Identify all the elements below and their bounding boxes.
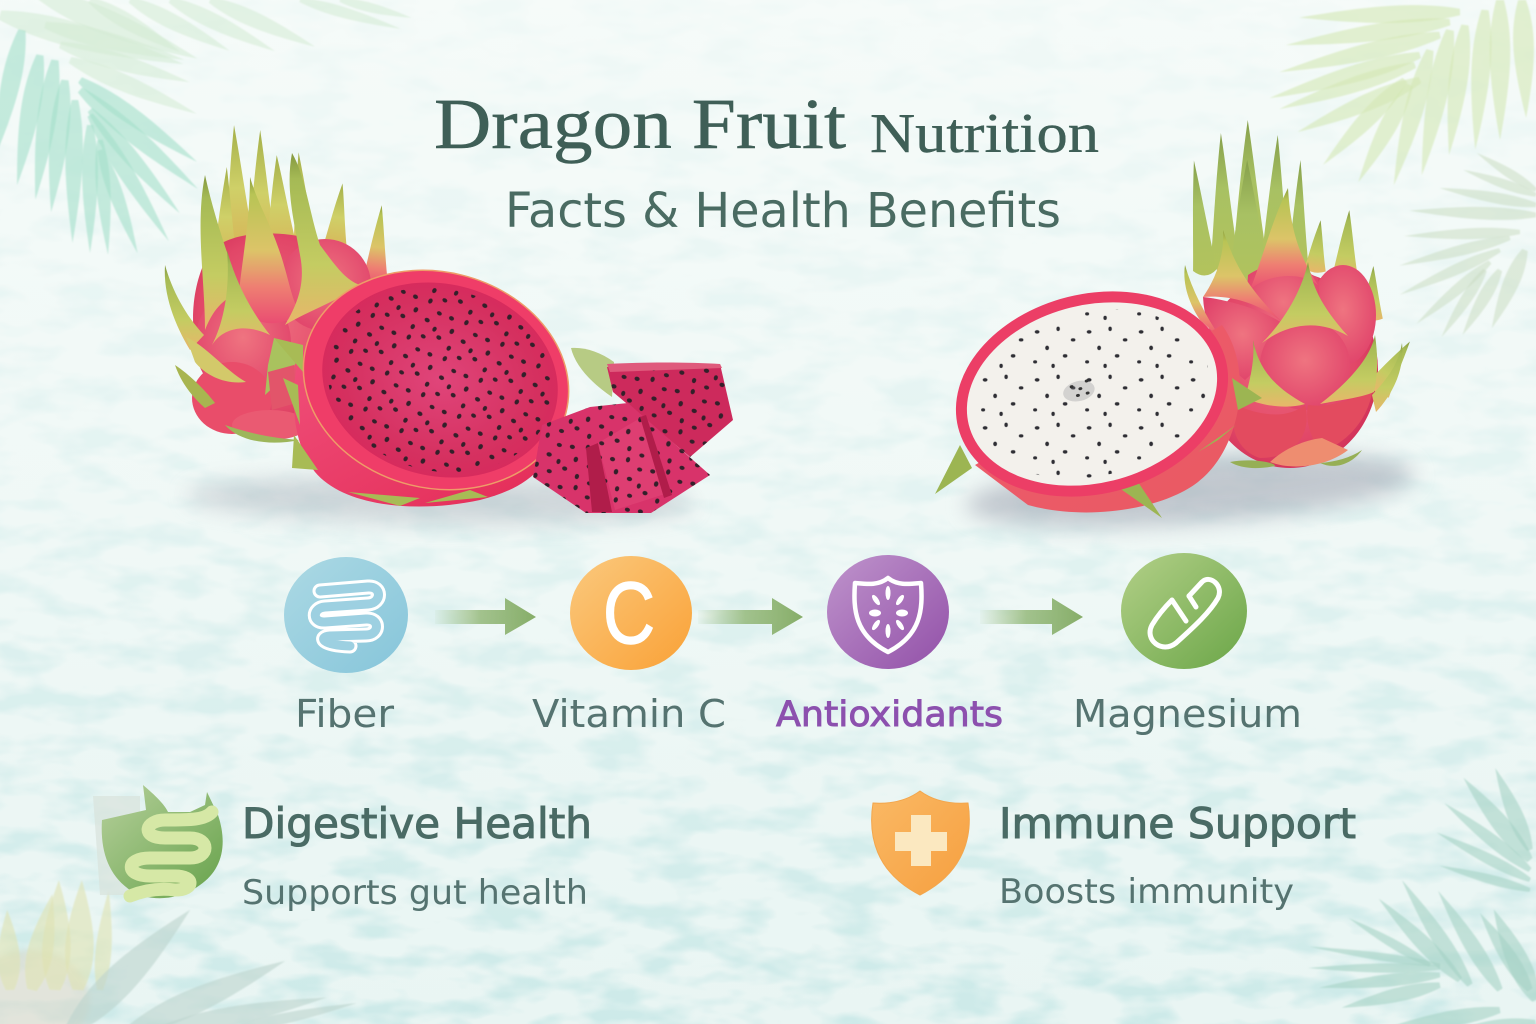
back spikes xyxy=(1304,209,1422,400)
nutrient labels xyxy=(295,692,1302,736)
benefit: immune support xyxy=(872,791,1356,912)
heading: Immune Support: Immune Support xyxy=(999,799,1356,848)
flesh xyxy=(301,258,579,502)
title: Nutrition: Nutrition xyxy=(870,103,1099,165)
heading: Digestive Health: Digestive Health xyxy=(242,799,592,848)
right lobe xyxy=(279,239,371,331)
left lobes xyxy=(195,288,291,398)
upper lobes xyxy=(1310,265,1376,365)
title xyxy=(434,84,1099,239)
label: Magnesium: Magnesium xyxy=(1073,692,1302,736)
base leaves xyxy=(1230,450,1362,468)
ground shadows xyxy=(185,440,1417,540)
outer skin xyxy=(975,325,1240,512)
icon: vitamin C xyxy=(570,556,692,670)
illustration: whole white-flesh dragon fruit xyxy=(1183,120,1422,468)
title: Dragon Fruit: Dragon Fruit xyxy=(434,84,846,164)
icon: antioxidants shield xyxy=(827,555,949,669)
lower leaf scales xyxy=(186,337,246,383)
arrow 1 xyxy=(435,598,536,635)
body xyxy=(193,233,369,435)
palm leaves: top left xyxy=(0,0,409,254)
left mid scale xyxy=(201,175,240,330)
arrow 3 xyxy=(980,598,1083,635)
outer skin xyxy=(294,350,568,507)
cut face rim xyxy=(280,243,592,517)
right curved scale xyxy=(285,153,360,325)
icon: vitamin C: C xyxy=(603,565,655,662)
illustration: whole red dragon fruit xyxy=(165,125,396,443)
icon: immune shield xyxy=(872,791,969,895)
icon: fiber / intestine xyxy=(284,557,408,673)
spikes on skin xyxy=(935,378,1262,518)
crown leaves xyxy=(213,125,356,268)
centre lobe xyxy=(1260,320,1350,410)
arrow 2 xyxy=(698,598,803,635)
illustration: halved white-flesh dragon fruit xyxy=(934,264,1262,524)
left outer spike xyxy=(165,265,204,350)
text: Boosts immunity: Boosts immunity xyxy=(999,872,1294,912)
illustration: red fruit chunks xyxy=(533,348,733,513)
subtitle: Facts & Health Benefits xyxy=(505,183,1061,239)
base leaf xyxy=(225,425,300,443)
label: Antioxidants: Antioxidants xyxy=(776,695,1003,735)
cut face rim xyxy=(934,264,1250,524)
upper spike xyxy=(1250,188,1318,290)
benefit: digestive health xyxy=(93,785,592,913)
nutrient flow row xyxy=(284,553,1247,673)
icon: digestive xyxy=(93,785,223,898)
left lobe xyxy=(1203,297,1282,380)
text: Supports gut health: Supports gut health xyxy=(242,873,588,913)
palm leaves: top right xyxy=(1270,0,1536,336)
palm leaves: bottom left xyxy=(0,881,354,1024)
stem chunk xyxy=(571,348,614,397)
crown leaves xyxy=(1183,120,1313,296)
lower lobes xyxy=(1233,405,1307,458)
back cube xyxy=(607,364,733,457)
label: Fiber: Fiber xyxy=(295,692,394,736)
white flesh with seeds xyxy=(947,277,1237,511)
illustration: halved red dragon fruit xyxy=(274,243,592,517)
icon: magnesium capsule xyxy=(1121,553,1247,669)
central scale xyxy=(238,177,300,323)
palm leaves: bottom right xyxy=(1310,769,1536,1024)
front wedges xyxy=(533,403,710,513)
body xyxy=(1202,272,1378,468)
lobe spike xyxy=(212,250,270,345)
label: Vitamin C: Vitamin C xyxy=(532,692,726,736)
skin spikes xyxy=(274,338,488,506)
